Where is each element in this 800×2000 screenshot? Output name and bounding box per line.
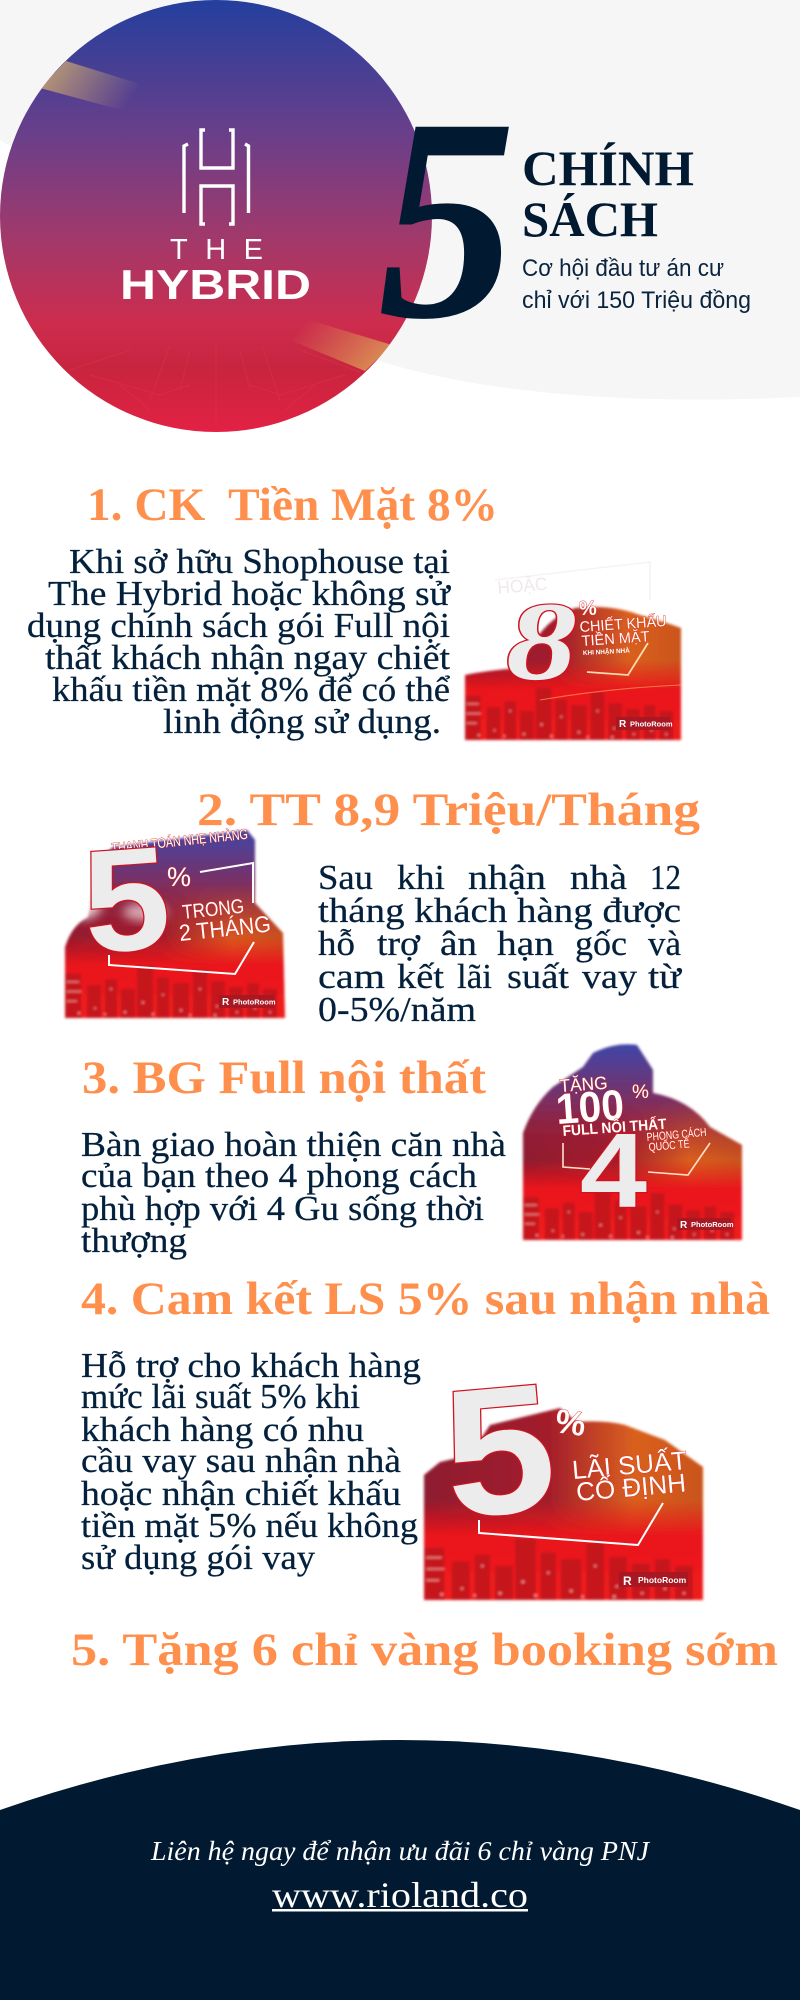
image: 100% full furniture promo: %	[632, 1082, 649, 1103]
image: 100% full furniture promo: R	[680, 1220, 688, 1231]
subtitle	[522, 255, 751, 314]
text block 2: cam	[318, 957, 385, 996]
image: 8% promo: %	[579, 598, 597, 620]
heading 2: 2. TT 8,9 Triệu/Tháng	[197, 784, 701, 836]
heading 1: 1. CK Tiền Mặt 8%	[87, 479, 498, 531]
heading 4: 4. Cam kết LS 5% sau nhận nhà	[81, 1273, 770, 1325]
text block 2: gốc	[575, 924, 627, 963]
image: 8% promo: HOẶC	[497, 574, 548, 598]
image: 8% promo: R	[619, 719, 627, 730]
image: 8% promo: CHIẾT KHẤU	[579, 613, 667, 636]
image: 5% in 2 months promo: TRONG	[181, 896, 245, 924]
text block 4: hoặc nhận chiết khấu	[81, 1474, 401, 1513]
text block 2: trợ	[377, 924, 421, 963]
text block 3: Bàn giao hoàn thiện căn nhà	[81, 1125, 506, 1164]
text block 1: dụng chính sách gói Full nội	[27, 606, 450, 645]
text block 2: 0-5%/năm	[318, 990, 476, 1029]
text block 4: tiền mặt 5% nếu không	[81, 1506, 418, 1545]
image: 5% in 2 months promo: 5	[78, 815, 175, 984]
text block 2: kết	[397, 957, 444, 996]
image: 5% in 2 months promo: 2 THÁNG	[178, 910, 272, 946]
image: 8% promo: TIỀN MẶT	[581, 628, 650, 650]
text block 4: Hỗ trợ cho khách hàng	[81, 1346, 421, 1385]
text block 2: hỗ	[318, 924, 355, 963]
text block 3: của bạn theo 4 phong cách	[81, 1156, 478, 1195]
text block 3: phù hợp với 4 Gu sống thời	[81, 1189, 484, 1228]
image: 5% in 2 months promo: R	[222, 997, 230, 1008]
light streaks	[42, 61, 390, 386]
title: CHÍNH SÁCH	[522, 140, 694, 247]
text block 4: sử dụng gói vay	[81, 1538, 316, 1577]
text block 4: khách hàng có nhu	[81, 1410, 364, 1449]
text block 1: linh động sử dụng.	[163, 702, 441, 741]
heading 5: 5. Tặng 6 chỉ vàng booking sớm	[71, 1624, 778, 1676]
text block 2: nhà	[570, 858, 628, 897]
image: 5% fixed rate promo: LÃI SUẤT	[571, 1445, 688, 1485]
image: 100% full furniture promo: PhotoRoom	[691, 1220, 734, 1229]
image: 8% promo: KHI NHẬN NHÀ	[583, 646, 630, 657]
text block 2	[318, 858, 682, 1029]
image: 100% full furniture promo: TẶNG	[559, 1073, 608, 1096]
footer panel	[0, 1740, 800, 2000]
image: 100% full furniture promo	[520, 1040, 745, 1242]
text block 2: hạn	[497, 924, 554, 963]
subtitle: Cơ hội đầu tư án cư	[522, 255, 724, 282]
text block 1: Khi sở hữu Shophouse tại	[69, 542, 450, 581]
text block 2: khi	[397, 858, 445, 897]
image: 5% in 2 months promo	[60, 815, 290, 1020]
text block 3: thượng	[81, 1221, 187, 1260]
image: 8% promo: PhotoRoom	[630, 720, 673, 728]
icon: The Hybrid logo mark	[184, 130, 248, 224]
text block 4	[81, 1346, 421, 1577]
text block 1: The Hybrid hoặc không sử	[48, 574, 451, 613]
image: 8% promo	[460, 562, 685, 745]
image: 5% in 2 months promo: PhotoRoom	[233, 998, 276, 1006]
title: CHÍNH SÁCH: CHÍNH	[522, 140, 694, 196]
header background curve	[0, 0, 800, 400]
text block 1	[27, 542, 451, 741]
image: 100% full furniture promo: 4	[580, 1112, 647, 1230]
image: 5% in 2 months promo: THANH TOÁN NHẸ NHÀNG	[111, 826, 249, 856]
footer website link: www.rioland.co	[272, 1875, 528, 1915]
image: 100% full furniture promo: 100	[554, 1081, 626, 1134]
image: 5% fixed rate promo	[422, 1384, 705, 1602]
image: 8% promo: 8	[506, 580, 577, 704]
text block 1: khấu tiền mặt 8% để có thể	[52, 670, 450, 709]
text block 2: tháng khách hàng được	[318, 891, 681, 930]
image: 100% full furniture promo: PHONG CÁCH	[646, 1126, 707, 1144]
heading 3: 3. BG Full nội thất	[82, 1052, 486, 1104]
text block 2: và	[648, 924, 681, 963]
text block 2: từ	[648, 957, 682, 996]
text block 4: mức lãi suất 5% khi	[81, 1377, 360, 1416]
text block 1: thất khách nhận ngay chiết	[45, 638, 450, 677]
logo text: THE: THE	[170, 234, 263, 266]
text block 2: Sau	[318, 858, 373, 897]
text block 2: vay	[582, 957, 638, 996]
image: 5% fixed rate promo: %	[553, 1402, 588, 1444]
image: 5% fixed rate promo: 5	[436, 1344, 563, 1557]
text block 2: lãi	[457, 957, 492, 996]
big numeral 5: 5	[378, 58, 516, 379]
image: 100% full furniture promo: QUỐC TẾ	[648, 1136, 690, 1154]
logo circle panel	[0, 0, 432, 432]
footer call to action: Liên hệ ngay để nhận ưu đãi 6 chỉ vàng PNJ	[150, 1836, 651, 1866]
image: 5% fixed rate promo: PhotoRoom	[638, 1575, 687, 1585]
image: 5% fixed rate promo: R	[623, 1574, 632, 1588]
text block 2: suất	[507, 957, 569, 996]
logo text: HYBRID: HYBRID	[120, 261, 311, 308]
text block 2: ân	[440, 924, 477, 963]
text block 2: nhận	[468, 858, 546, 897]
image: 5% fixed rate promo: CỐ ĐỊNH	[575, 1468, 687, 1507]
text block 4: cầu vay sau nhận nhà	[81, 1441, 401, 1480]
image: 5% in 2 months promo: %	[167, 862, 191, 892]
text block 3	[81, 1125, 506, 1260]
image: 100% full furniture promo: FULL NỘI THẤT	[562, 1115, 667, 1140]
subtitle: chỉ với 150 Triệu đồng	[522, 287, 751, 314]
title: CHÍNH SÁCH: SÁCH	[522, 191, 658, 247]
text block 2: 12	[650, 858, 681, 897]
